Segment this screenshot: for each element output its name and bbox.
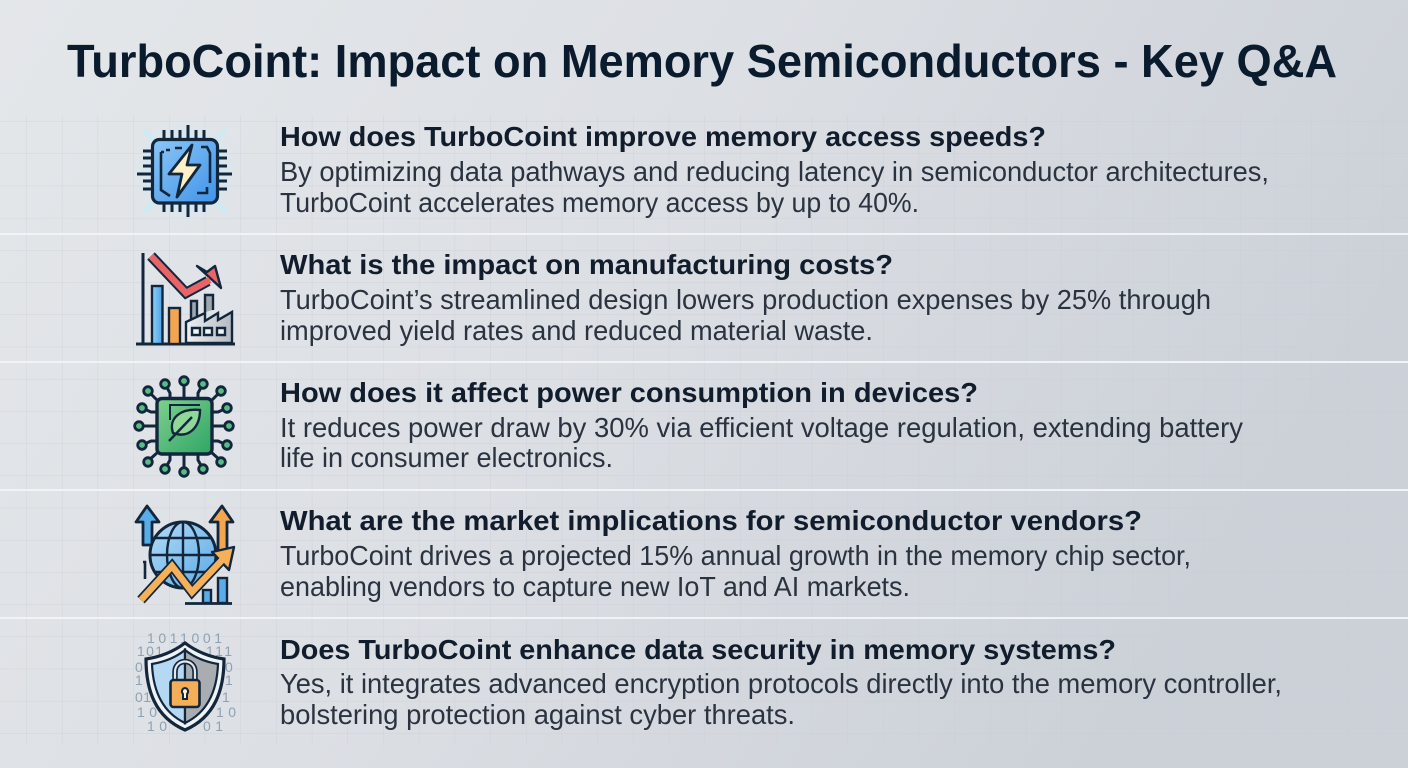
icon: shield with padlock and binary digits: 10 [216,704,236,720]
answer 2: improved yield rates and reduced material waste. [280,315,873,346]
answer 3 [280,412,1243,473]
panel: manufacturing costs [136,249,1211,346]
icon: shield with padlock and binary digits: 0 [225,659,233,675]
panel: market implications [136,505,1191,604]
answer 1: TurboCoint accelerates memory access by up to 40%. [280,187,919,218]
icon: shield with padlock and binary digits: 101 [137,643,163,659]
question 4: What are the market implications for semiconductor vendors? [280,505,1142,536]
panel: power consumption [135,377,1243,476]
answer 5 [280,668,1282,730]
answer 1 [280,156,1269,218]
answer 5: Yes, it integrates advanced encryption protocols directly into the memory controller, [280,668,1282,699]
answer 2 [280,284,1211,346]
icon: falling cost chart and factory [136,253,235,344]
answer 4: TurboCoint drives a projected 15% annual growth in the memory chip sector, [280,540,1191,571]
answer 1: By optimizing data pathways and reducing latency in semiconductor architectures, [280,156,1269,187]
icon: globe with growth arrows [136,506,234,604]
answer 5: bolstering protection against cyber threats. [280,699,795,730]
icon: shield with padlock and binary digits: 10 [147,718,167,734]
icon: green chip with leaf [135,377,233,476]
question 3: How does it affect power consumption in devices? [280,377,978,408]
panel: data security [135,630,1282,734]
answer 4: enabling vendors to capture new IoT and AI markets. [280,571,910,602]
answer 4 [280,540,1191,602]
question 5: Does TurboCoint enhance data security in memory systems? [280,634,1116,665]
icon: shield with padlock and binary digits: 01 [203,718,223,734]
answer 3: It reduces power draw by 30% via efficient voltage regulation, extending battery [280,412,1243,443]
icon: shield with padlock and binary digits: 111 [206,643,232,659]
icon: chip with lightning bolt [131,117,239,225]
answer 3: life in consumer electronics. [280,442,613,473]
icon: shield with padlock and binary digits: 0 [135,659,143,675]
question 2: What is the impact on manufacturing costs? [280,249,893,280]
icon: shield with padlock and binary digits: 10 [137,704,157,720]
icon: shield with padlock and binary digits: 1 [222,689,230,705]
icon: shield with padlock and binary digits [135,630,236,734]
icon: shield with padlock and binary digits: 1 [135,672,143,688]
icon: shield with padlock and binary digits: 01 [135,689,151,705]
question 1: How does TurboCoint improve memory access speeds? [280,121,1046,152]
icon: shield with padlock and binary digits: 1011001 [147,630,222,646]
answer 2: TurboCoint’s streamlined design lowers production expenses by 25% through [280,284,1211,315]
icon: shield with padlock and binary digits: 1 [225,672,233,688]
panel: memory access speeds [131,117,1269,225]
title: TurboCoint: Impact on Memory Semiconductors - Key Q&A [67,35,1337,87]
